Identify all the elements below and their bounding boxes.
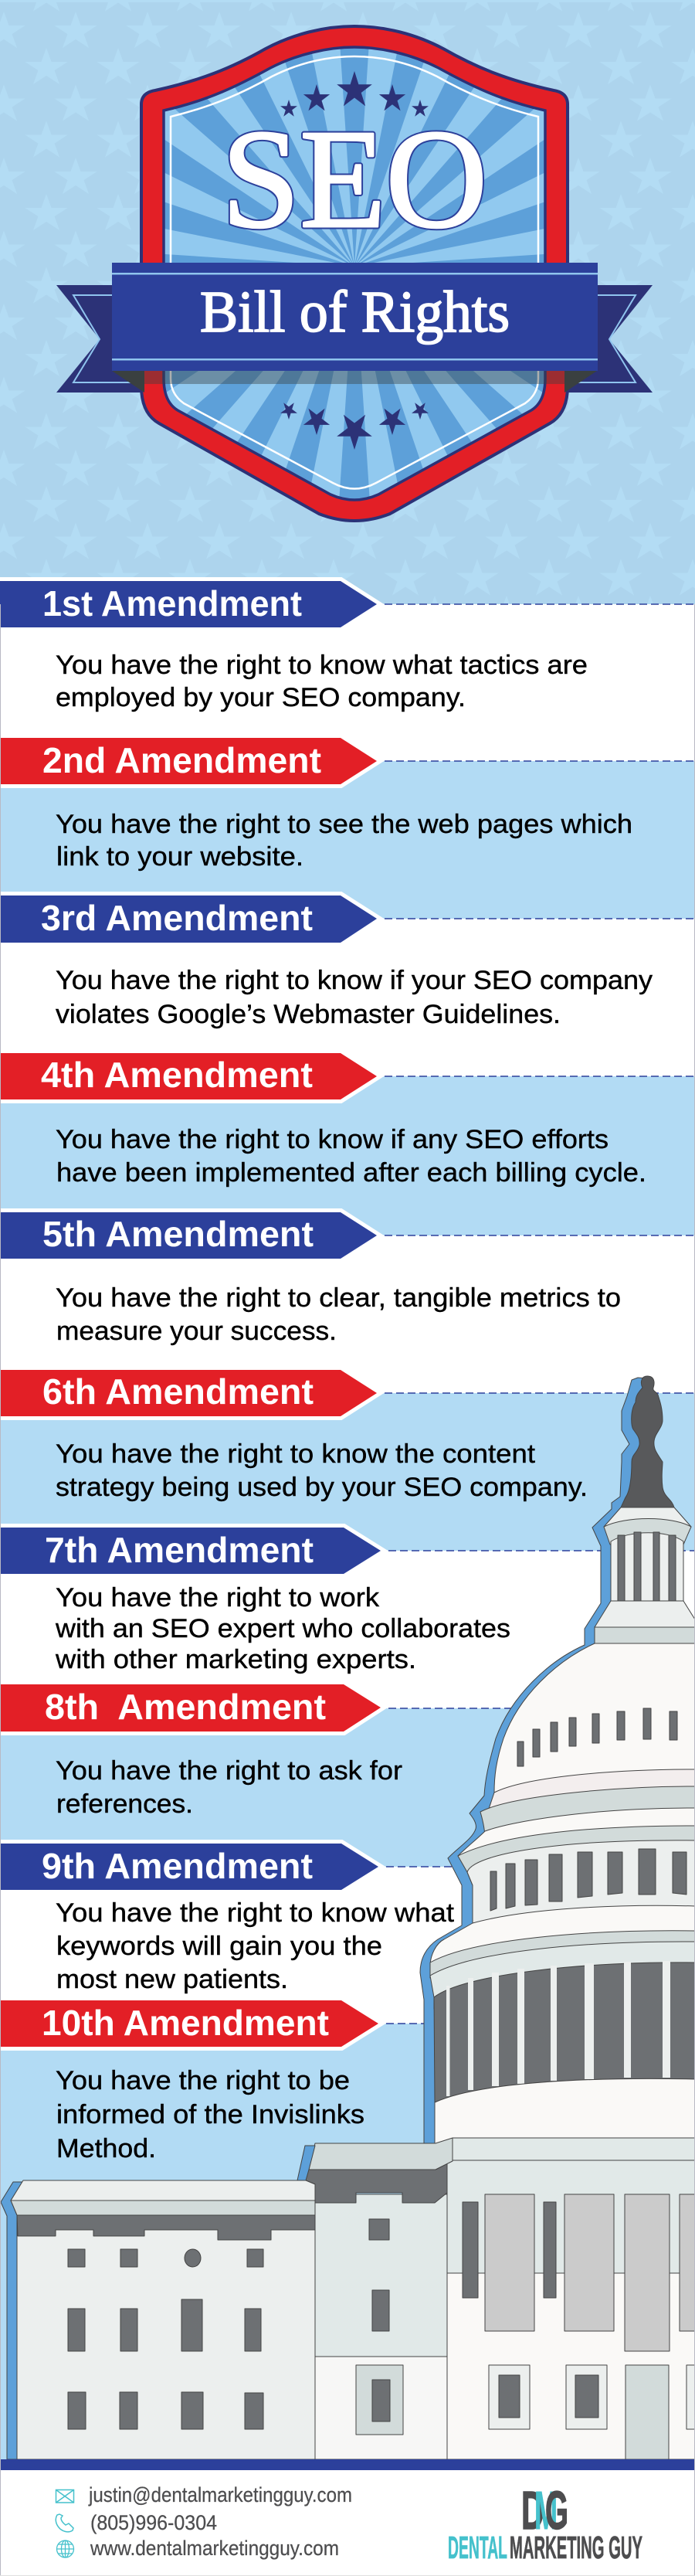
text: right 8 xyxy=(56,1756,402,1819)
banner xyxy=(112,263,598,371)
capitol blue shadow xyxy=(420,1378,649,2146)
text: right 3: violates Google’s Webmaster Guidelines. xyxy=(56,1000,561,1029)
text: right 2 xyxy=(56,810,632,872)
text: right 9: most new patients. xyxy=(56,1965,288,1994)
amendment 8 xyxy=(0,1684,402,1819)
text: right 7: with an SEO expert who collaborates xyxy=(55,1614,510,1643)
text: right 2: link to your website. xyxy=(56,842,303,872)
amendment 10 xyxy=(0,2000,378,2163)
footer white panel xyxy=(0,2470,695,2576)
ribbon: 8th Amendment: 8th Amendment xyxy=(45,1687,326,1727)
drum xyxy=(430,1808,695,2148)
stars: top row xyxy=(280,71,429,117)
capitol building illustration xyxy=(1,1376,695,2459)
header star background xyxy=(0,0,695,604)
text: right 4: You have the right to know if any SEO efforts xyxy=(56,1125,609,1154)
ribbon tail: left xyxy=(56,285,147,393)
contact email: justin@dentalmarketingguy.com xyxy=(88,2483,352,2506)
ribbon: 7th Amendment xyxy=(0,1528,381,1574)
icon: phone xyxy=(56,2514,73,2532)
logo: wordmark: DENTAL xyxy=(448,2530,507,2565)
text: right 10: informed of the Invislinks xyxy=(56,2100,364,2129)
ribbon: 6th Amendment: 6th Amendment xyxy=(42,1371,314,1412)
ribbon: 4th Amendment: 4th Amendment xyxy=(41,1055,313,1095)
banner shadow xyxy=(112,371,597,393)
ribbon: 1st Amendment: 1st Amendment xyxy=(42,583,302,624)
ribbon: 2nd Amendment xyxy=(0,738,377,784)
ribbon: 2nd Amendment: 2nd Amendment xyxy=(42,740,321,780)
middle wing xyxy=(306,2138,453,2459)
ribbon: 3rd Amendment xyxy=(0,895,377,943)
text: right 6 xyxy=(56,1439,588,1502)
text: right 9: You have the right to know what xyxy=(56,1898,455,1928)
alternating section backgrounds xyxy=(0,604,695,2459)
text: right 1: You have the right to know what tactics are xyxy=(56,651,588,680)
right wing xyxy=(447,2138,695,2459)
text: right 10 xyxy=(56,2066,364,2163)
text: right 8: references. xyxy=(56,1789,193,1819)
ribbon: 3rd Amendment: 3rd Amendment xyxy=(41,898,313,938)
logo: DMG monogram: D xyxy=(521,2480,544,2540)
text: right 5: measure your success. xyxy=(56,1317,337,1346)
ribbon: 8th Amendment xyxy=(0,1684,381,1731)
text: right 8: You have the right to ask for xyxy=(56,1756,402,1786)
title: Bill of Rights: Bill of Rights xyxy=(200,280,510,345)
footer navy bar xyxy=(0,2459,695,2470)
ribbon: 4th Amendment xyxy=(0,1053,377,1099)
ribbon: 5th Amendment: 5th Amendment xyxy=(42,1214,314,1254)
text: right 5: You have the right to clear, tangible metrics to xyxy=(56,1283,621,1313)
icon: globe xyxy=(57,2540,74,2557)
ribbon: 10th Amendment: 10th Amendment xyxy=(42,2003,329,2043)
text: right 4: have been implemented after each billing cycle. xyxy=(56,1158,646,1188)
title: SEO: SEO xyxy=(222,100,487,257)
ribbon: 9th Amendment xyxy=(0,1844,378,1890)
text: right 7: with other marketing experts. xyxy=(55,1645,416,1674)
amendment 3 xyxy=(0,895,653,1029)
text: right 7: You have the right to work xyxy=(56,1583,380,1613)
amendment 5 xyxy=(0,1212,621,1346)
text: right 3 xyxy=(56,966,653,1029)
amendment 9 xyxy=(0,1844,455,1994)
ribbon tail: right xyxy=(562,285,653,393)
amendment 1 xyxy=(0,581,588,712)
text: right 6: strategy being used by your SEO company. xyxy=(56,1473,588,1502)
text: right 4 xyxy=(56,1125,646,1188)
shield red border xyxy=(141,26,568,521)
ribbon: 1st Amendment xyxy=(0,581,377,627)
contact phone: (805)996-0304 xyxy=(90,2511,217,2534)
left wing xyxy=(11,2180,315,2459)
logo: DMG monogram: G xyxy=(545,2480,568,2540)
ribbon: 10th Amendment xyxy=(0,2000,378,2047)
stars: bottom row xyxy=(280,403,429,450)
text: right 6: You have the right to know the content xyxy=(56,1439,536,1469)
text: right 10: Method. xyxy=(56,2134,156,2163)
spire xyxy=(621,1376,674,1507)
ribbon: 7th Amendment: 7th Amendment xyxy=(45,1530,314,1570)
amendment 7 xyxy=(0,1528,510,1674)
ribbon: 5th Amendment xyxy=(0,1212,377,1259)
shield badge with title xyxy=(56,25,653,522)
title: SEO: SEO xyxy=(222,100,487,257)
shield sunburst field xyxy=(162,46,547,501)
icon: envelope xyxy=(56,2489,74,2503)
text: right 10: You have the right to be xyxy=(56,2066,350,2095)
text: right 1 xyxy=(56,651,588,712)
text: right 9 xyxy=(56,1898,455,1994)
lantern xyxy=(595,1507,695,1643)
ribbon: 6th Amendment xyxy=(0,1370,377,1416)
contact website: www.dentalmarketingguy.com xyxy=(90,2537,339,2560)
amendment 4 xyxy=(0,1053,646,1188)
logo: DMG monogram: M xyxy=(534,2480,558,2540)
left wing shadow xyxy=(1,2146,315,2459)
text: right 3: You have the right to know if your SEO company xyxy=(56,966,653,995)
dome xyxy=(480,1643,695,1839)
amendment 6 xyxy=(0,1370,588,1502)
footer xyxy=(0,2459,695,2576)
text: right 9: keywords will gain you the xyxy=(56,1932,382,1961)
text: right 1: employed by your SEO company. xyxy=(56,683,466,712)
text: right 7 xyxy=(55,1583,510,1674)
text: right 5 xyxy=(56,1283,621,1346)
text: right 2: You have the right to see the web pages which xyxy=(56,810,632,839)
ribbon: 9th Amendment: 9th Amendment xyxy=(42,1846,313,1886)
logo: wordmark xyxy=(448,2530,642,2565)
amendment 2 xyxy=(0,738,632,872)
